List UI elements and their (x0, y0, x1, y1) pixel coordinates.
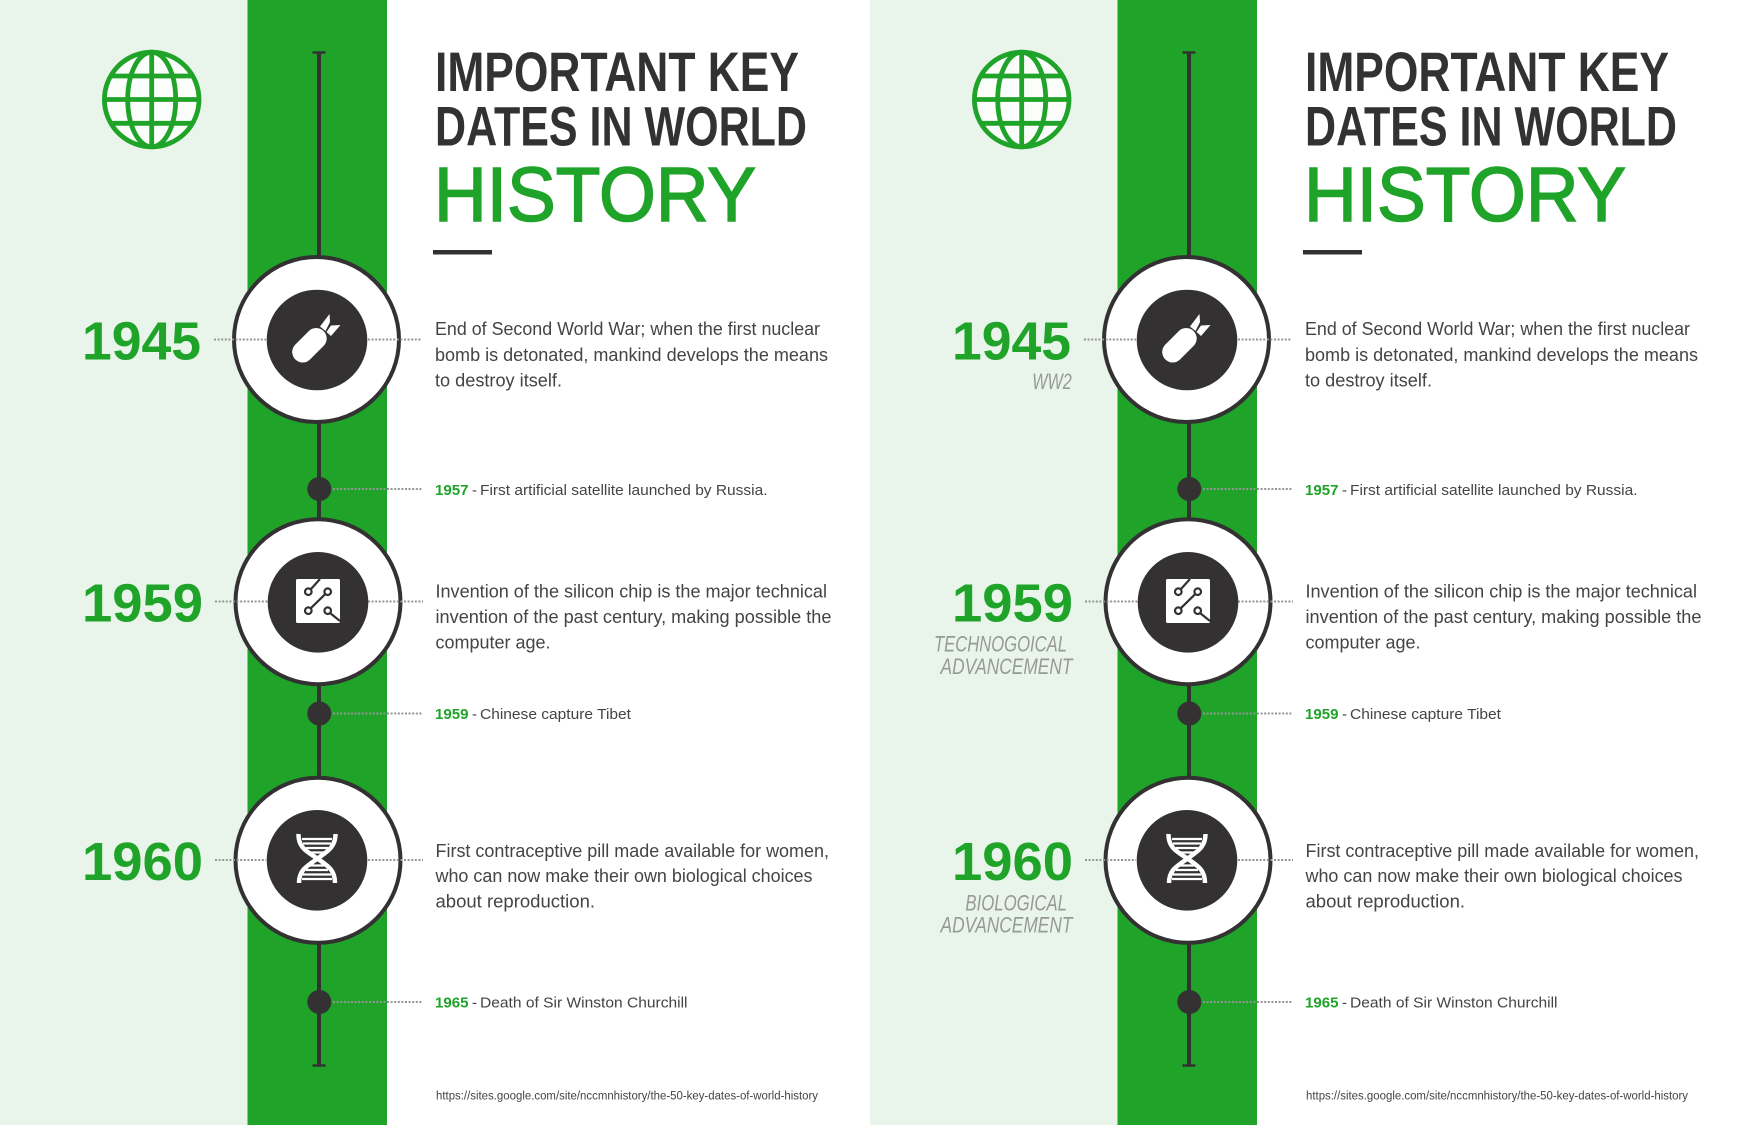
description 1945: End of Second World War; when the first nuclear (435, 319, 820, 339)
year 1959 with category: ADVANCEMENT (939, 654, 1074, 679)
year 1960 with category (939, 832, 1074, 938)
event 1959 (307, 702, 632, 726)
description 1959: Invention of the silicon chip is the major technical (1306, 582, 1697, 602)
event 1959: 1959 (435, 706, 468, 723)
event 1957: - (472, 482, 477, 499)
event 1959: 1959 (1305, 706, 1338, 723)
white content column (387, 0, 870, 1125)
event 1965: 1965 (1305, 994, 1338, 1012)
heading: HISTORY (434, 152, 756, 238)
icon: chip medallion (1085, 519, 1293, 684)
description 1945 (435, 319, 828, 390)
milestone 1960 (82, 778, 829, 943)
description 1960: who can now make their own biological choices (435, 866, 812, 886)
right pale column (870, 0, 1118, 1125)
timeline axis (312, 52, 326, 1066)
right white content column (1257, 0, 1739, 1125)
event 1959: Chinese capture Tibet (480, 706, 632, 723)
icon: bomb medallion (214, 257, 422, 422)
event 1959 (1177, 702, 1502, 726)
heading: HISTORY (1304, 152, 1626, 238)
icon: bomb medallion (1084, 257, 1292, 422)
year 1960 with category: 1960 (952, 832, 1073, 892)
event 1965: - (472, 994, 477, 1012)
milestone 1959 (934, 519, 1702, 684)
icon: chip medallion (215, 519, 423, 684)
event 1959: Chinese capture Tibet (1350, 706, 1502, 723)
left pale column (0, 0, 248, 1125)
milestone 1945 (952, 257, 1698, 422)
icon: dna medallion (1085, 778, 1293, 943)
description 1959: computer age. (1306, 632, 1420, 652)
green timeline band (248, 0, 387, 1125)
timeline axis (1182, 52, 1196, 1066)
event 1965: - (1342, 994, 1347, 1012)
year 1960 with category: ADVANCEMENT (939, 912, 1074, 938)
year 1945: 1945 (82, 312, 201, 372)
year 1959 with category (934, 574, 1074, 679)
event 1957: First artificial satellite launched by Russia. (1350, 482, 1638, 499)
event 1959: - (1342, 706, 1347, 723)
description 1960: First contraceptive pill made available for women, (436, 841, 829, 861)
panel: right timeline (870, 0, 1739, 1125)
year 1960: 1960 (82, 832, 203, 892)
description 1960: about reproduction. (1306, 892, 1465, 912)
icon: globe (104, 52, 199, 147)
description 1945: to destroy itself. (435, 370, 562, 390)
heading rule (433, 250, 492, 254)
event 1957 (1177, 477, 1638, 501)
right green timeline band (1118, 0, 1257, 1125)
heading: IMPORTANT KEY (435, 40, 799, 103)
description 1959 (436, 582, 832, 652)
year 1945 with category: 1945 (952, 312, 1071, 372)
description 1959: invention of the past century, making possible the (1306, 607, 1702, 627)
description 1959: Invention of the silicon chip is the major technical (436, 582, 827, 602)
event 1965: Death of Sir Winston Churchill (1350, 994, 1558, 1012)
event 1957: - (1342, 482, 1347, 499)
description 1960: about reproduction. (436, 892, 595, 912)
description 1959: computer age. (436, 632, 550, 652)
description 1960: who can now make their own biological choices (1305, 866, 1682, 886)
description 1945: bomb is detonated, mankind develops the means (1305, 345, 1698, 365)
source url: https://sites.google.com/site/nccmnhistory/the-50-key-dates-of-world-history (436, 1090, 818, 1102)
description 1960 (1305, 841, 1699, 912)
event 1965 (307, 990, 688, 1014)
description 1945: End of Second World War; when the first nuclear (1305, 319, 1690, 339)
event 1957 (307, 477, 768, 501)
year 1959 with category: 1959 (952, 574, 1073, 634)
milestone 1945 (82, 257, 828, 422)
description 1959 (1306, 582, 1702, 652)
description 1960 (435, 841, 829, 912)
milestone 1960 (939, 778, 1699, 943)
heading rule (1303, 250, 1362, 254)
description 1945: bomb is detonated, mankind develops the means (435, 345, 828, 365)
heading: DATES IN WORLD (435, 94, 807, 158)
year 1960 with category: BIOLOGICAL (965, 890, 1067, 916)
event 1957: 1957 (435, 482, 468, 499)
year 1945 with category: WW2 (1032, 369, 1072, 394)
year 1959: 1959 (82, 574, 203, 634)
heading (434, 40, 807, 238)
event 1957: 1957 (1305, 482, 1338, 499)
source url: https://sites.google.com/site/nccmnhistory/the-50-key-dates-of-world-history (1306, 1090, 1688, 1102)
icon: dna medallion (215, 778, 423, 943)
event 1965: Death of Sir Winston Churchill (480, 994, 688, 1012)
milestone 1959 (82, 519, 832, 684)
event 1965: 1965 (435, 994, 468, 1012)
description 1959: invention of the past century, making possible the (436, 607, 832, 627)
event 1965 (1177, 990, 1558, 1014)
panel: left timeline (0, 0, 870, 1125)
year 1959 with category: TECHNOGOICAL (934, 632, 1067, 656)
description 1945 (1305, 319, 1698, 390)
event 1959: - (472, 706, 477, 723)
description 1960: First contraceptive pill made available for women, (1306, 841, 1699, 861)
heading (1304, 40, 1677, 238)
icon: globe (974, 52, 1069, 147)
event 1957: First artificial satellite launched by Russia. (480, 482, 768, 499)
description 1945: to destroy itself. (1305, 370, 1432, 390)
